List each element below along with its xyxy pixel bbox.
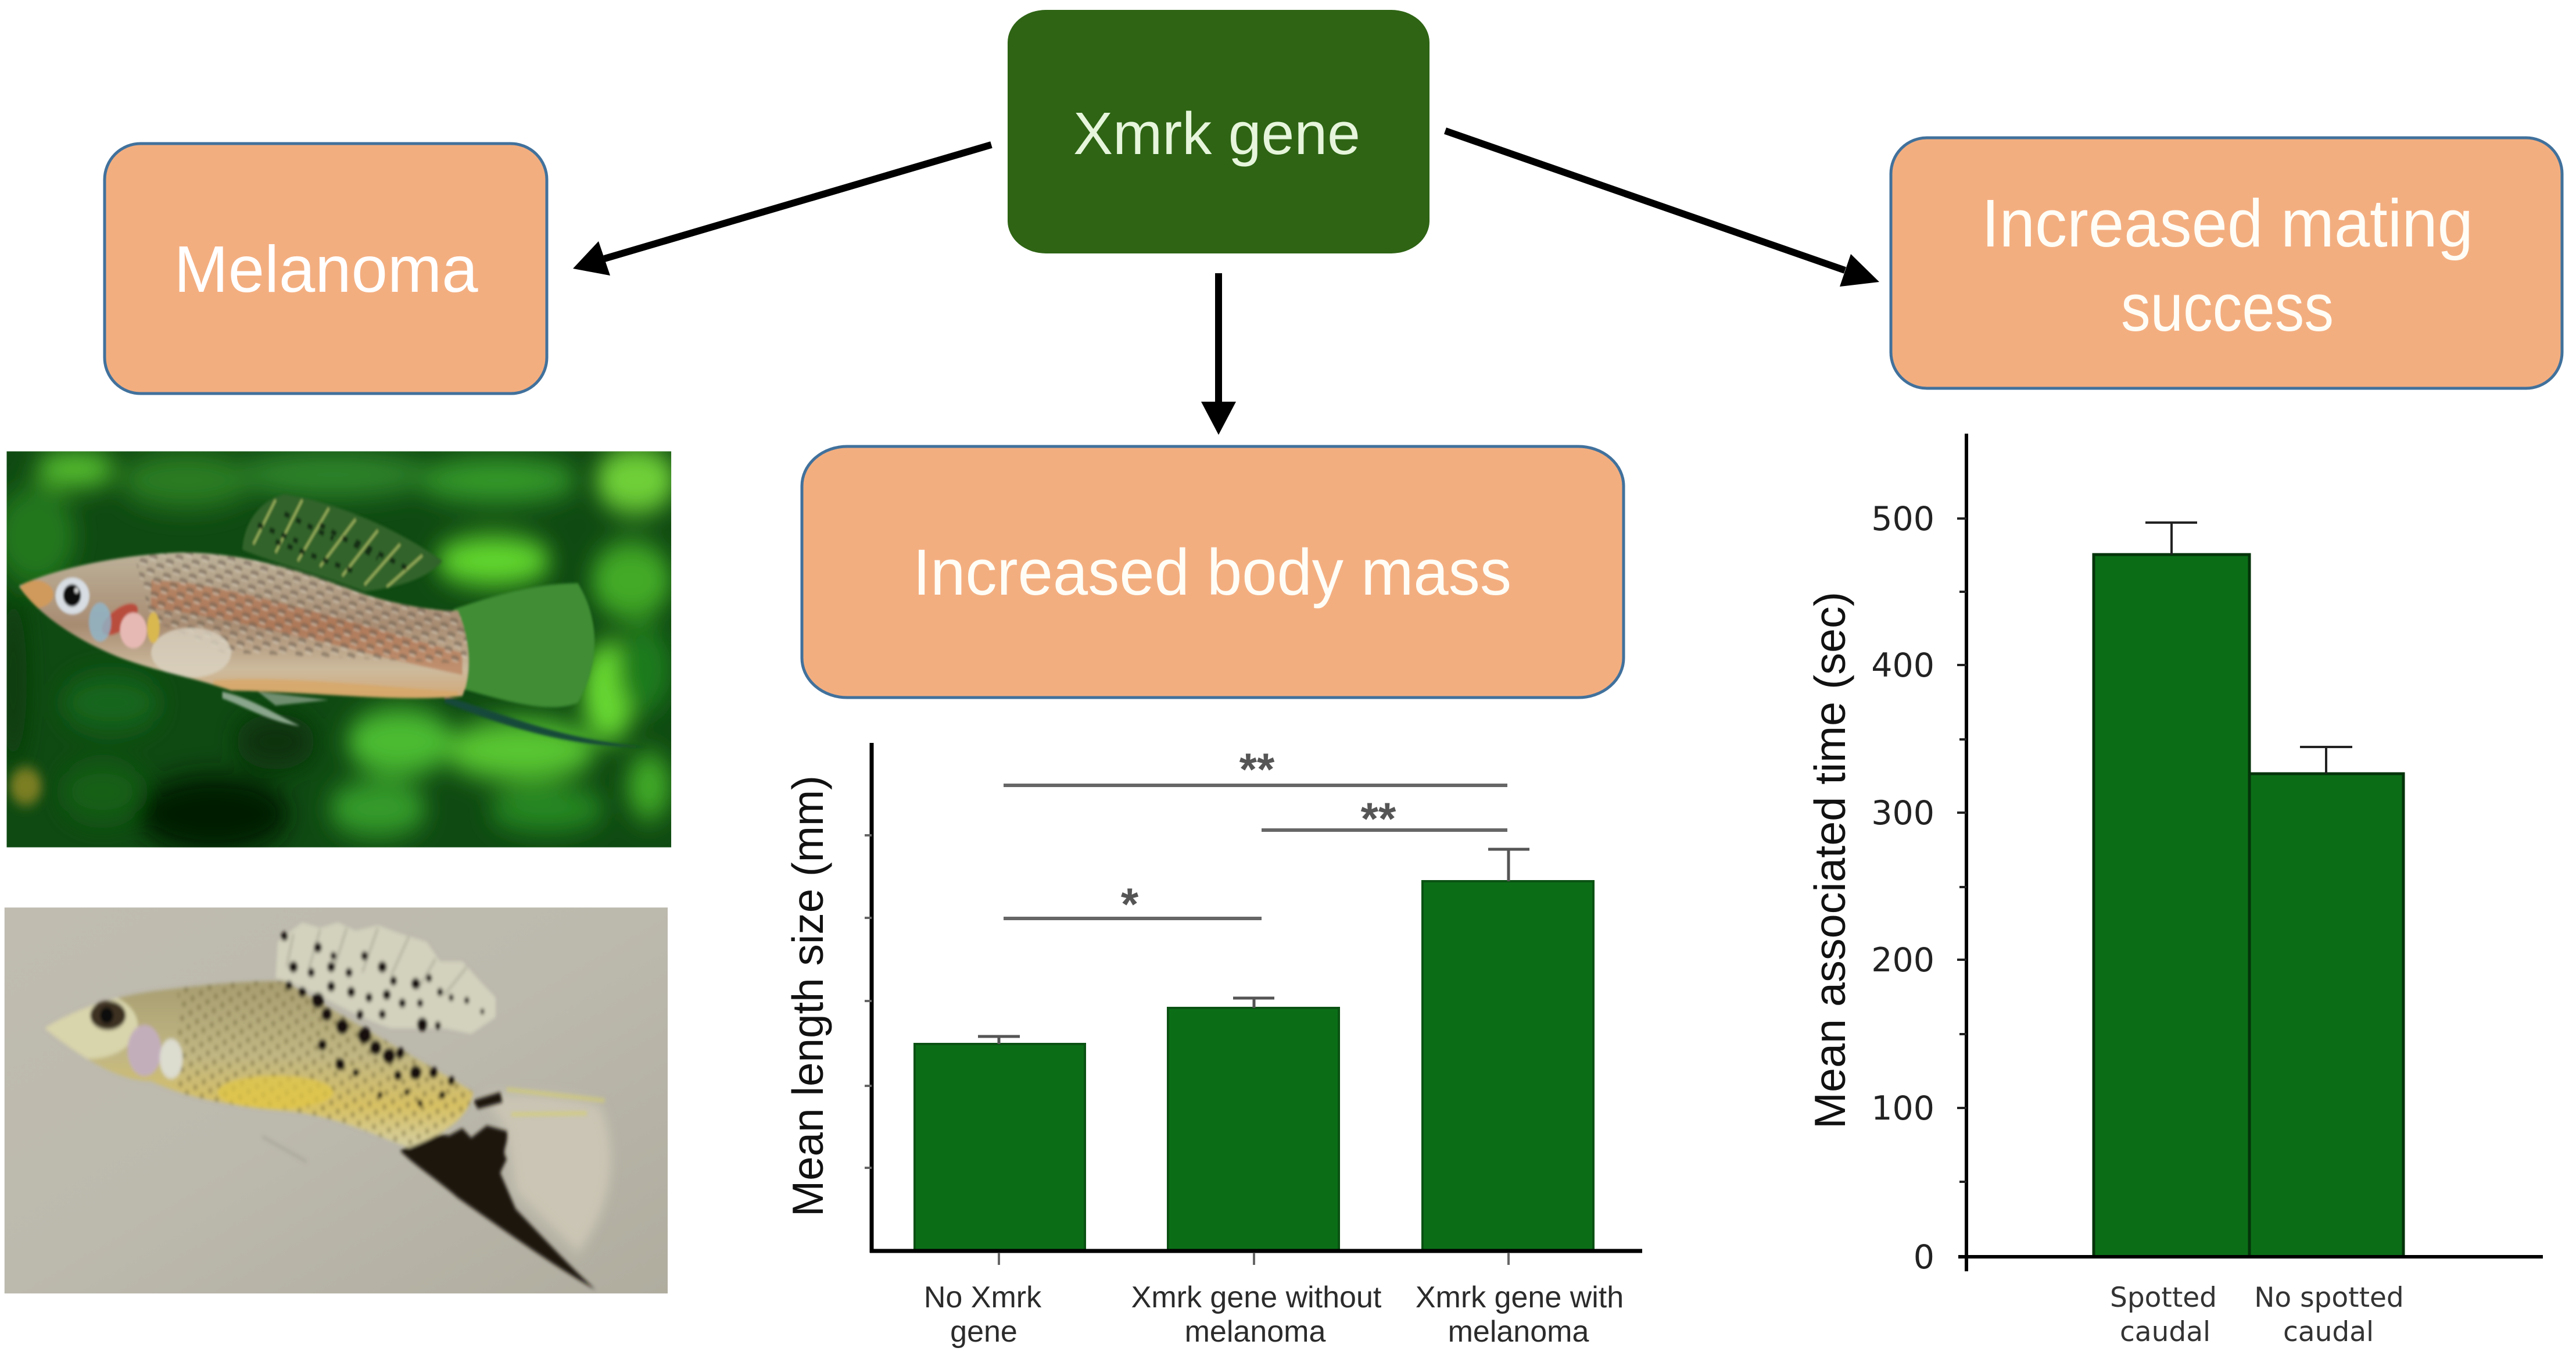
box: Xmrk gene xyxy=(1008,10,1429,253)
eye xyxy=(90,1001,126,1030)
box: Increased body mass xyxy=(802,446,1624,698)
black spots xyxy=(281,932,485,1107)
y axis label: Mean associated time (sec) xyxy=(1805,592,1854,1129)
bars xyxy=(2094,555,2403,1257)
significance stars: * xyxy=(1121,878,1139,929)
body xyxy=(44,981,474,1148)
box: Increased mating success: success xyxy=(2121,270,2334,345)
y tick labels: 200 xyxy=(1871,941,1934,979)
ventral fin xyxy=(222,692,300,726)
y tick labels: 500 xyxy=(1871,500,1934,538)
y axis label: Mean length size (mm) xyxy=(783,775,832,1217)
x axis labels: Spotted xyxy=(2110,1282,2217,1314)
black tail wedge xyxy=(400,1125,596,1290)
x axis labels: No spotted xyxy=(2254,1282,2404,1314)
dorsal fin xyxy=(275,923,496,1034)
x axis labels: caudal xyxy=(2120,1316,2210,1348)
bars xyxy=(915,881,1593,1251)
tail xyxy=(453,583,594,707)
x axis labels: No Xmrk xyxy=(924,1281,1042,1314)
significance lines xyxy=(1004,785,1507,918)
chart: mean associated time xyxy=(1805,434,2543,1348)
x axis labels: melanoma xyxy=(1185,1315,1325,1349)
box: Melanoma: Melanoma xyxy=(174,233,478,306)
x axis labels xyxy=(2110,1282,2404,1348)
x axis labels: Xmrk gene with xyxy=(1416,1281,1624,1314)
eye xyxy=(56,578,89,614)
significance stars: ** xyxy=(1239,743,1275,795)
y tick labels: 300 xyxy=(1871,794,1934,832)
body xyxy=(19,552,468,698)
error bars xyxy=(2145,523,2352,774)
x axis labels: caudal xyxy=(2283,1316,2374,1348)
x axis labels: melanoma xyxy=(1448,1315,1589,1349)
significance stars xyxy=(1121,743,1396,929)
y tick labels: 100 xyxy=(1871,1089,1934,1128)
box: Increased body mass: Increased body mass xyxy=(913,536,1511,609)
arrow: gene to melanoma xyxy=(573,145,991,276)
x axis labels: gene xyxy=(950,1315,1017,1349)
significance stars: ** xyxy=(1361,793,1396,844)
chart: mean length size xyxy=(783,743,1642,1349)
photo: swordtail fish on green background xyxy=(0,447,676,853)
box: Increased mating success: Increased mating xyxy=(1982,185,2473,261)
box: Increased mating success xyxy=(1891,138,2562,388)
box: Melanoma xyxy=(105,144,547,394)
photo: swordtail fish with melanoma xyxy=(5,907,668,1293)
axes xyxy=(1958,434,2543,1271)
arrow: gene to mating success xyxy=(1445,131,1879,287)
x axis labels xyxy=(924,1281,1624,1349)
dorsal fin xyxy=(242,494,442,592)
arrow: gene to body mass xyxy=(1201,273,1236,435)
box: Xmrk gene: Xmrk gene xyxy=(1073,100,1360,167)
y tick labels: 0 xyxy=(1914,1238,1934,1277)
x axis labels: Xmrk gene without xyxy=(1131,1281,1382,1314)
axes xyxy=(870,743,1642,1253)
pale tail xyxy=(485,1094,611,1253)
y tick labels: 400 xyxy=(1871,646,1934,685)
y tick labels xyxy=(1871,500,1934,1277)
error bars xyxy=(978,849,1529,1044)
